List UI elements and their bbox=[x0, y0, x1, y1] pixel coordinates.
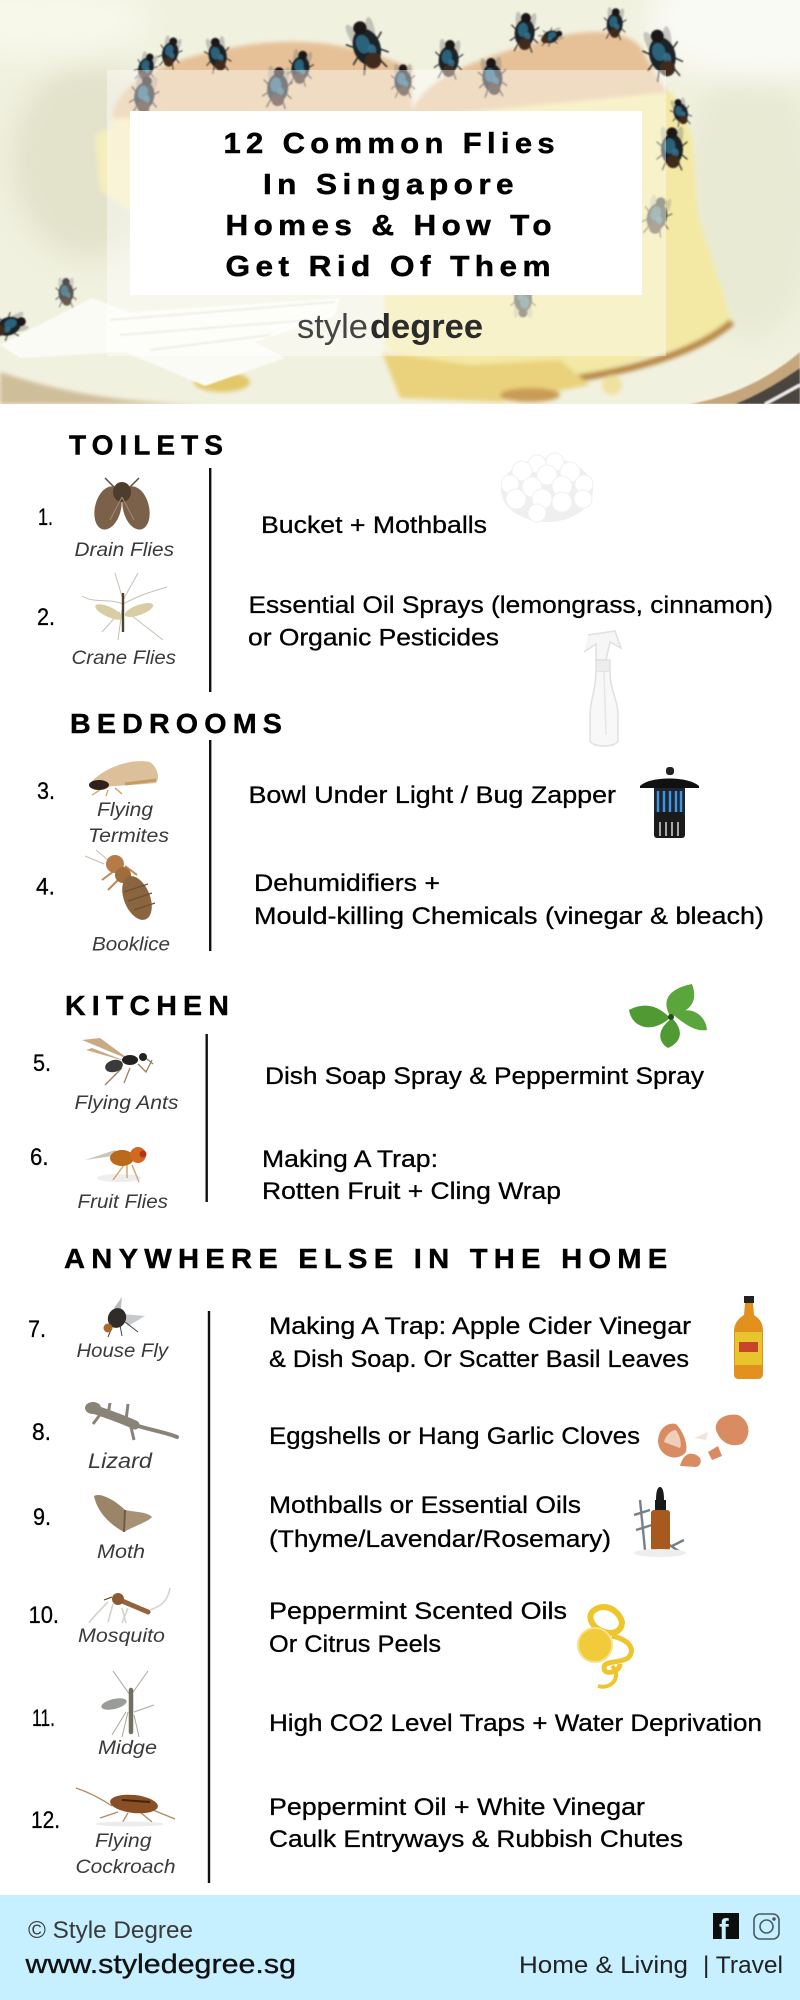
item 7: house fly: House Fly bbox=[76, 1341, 170, 1362]
icon: instagram bbox=[754, 1914, 779, 1939]
item 1: drain flies bbox=[38, 453, 593, 561]
item 2: crane flies: Essential Oil Sprays (lemongrass, cinnamon) bbox=[248, 592, 773, 619]
icon: spray bottle bbox=[584, 631, 621, 746]
divider: bedrooms bbox=[209, 740, 211, 951]
item 11: midge bbox=[32, 1671, 762, 1759]
footer: categories: | Travel bbox=[703, 1952, 783, 1979]
item 5: flying ants: Dish Soap Spray & Peppermint Spray bbox=[265, 1063, 704, 1090]
icon: citrus peel bbox=[578, 1607, 631, 1687]
item 7: house fly: Making A Trap: Apple Cider Vinegar bbox=[269, 1313, 691, 1340]
icon: mint leaf bbox=[629, 984, 707, 1048]
item 10: mosquito: Or Citrus Peels bbox=[269, 1631, 441, 1658]
icon: drain fly bbox=[90, 478, 154, 532]
title card bbox=[130, 111, 642, 295]
divider: anywhere else bbox=[208, 1311, 210, 1883]
item 3: flying termites: 3. bbox=[37, 778, 55, 805]
footer band bbox=[0, 1895, 800, 2000]
item 12: flying cockroach: Flying bbox=[95, 1831, 152, 1852]
item 10: mosquito: 10. bbox=[28, 1602, 59, 1629]
item 4: booklice: Dehumidifiers + bbox=[254, 870, 440, 897]
item 8: lizard: Eggshells or Hang Garlic Cloves bbox=[269, 1423, 640, 1450]
icon: facebook: f bbox=[719, 1914, 729, 1946]
icon: mothballs bbox=[501, 453, 593, 522]
icon: apple cider vinegar bottle bbox=[734, 1296, 763, 1379]
item 4: booklice: Booklice bbox=[92, 934, 170, 956]
icon: lizard bbox=[85, 1402, 177, 1440]
item 3: flying termites: Bowl Under Light / Bug Zapper bbox=[248, 782, 616, 809]
title card: Get Rid Of Them bbox=[226, 251, 556, 283]
header photo: flies on cake bbox=[0, 0, 800, 404]
item 4: booklice: 4. bbox=[36, 874, 55, 900]
divider: toilets bbox=[209, 468, 211, 692]
logo: styledegree bbox=[297, 308, 483, 346]
item 10: mosquito: Peppermint Scented Oils bbox=[269, 1598, 567, 1625]
item 1: drain flies: Bucket + Mothballs bbox=[261, 512, 487, 539]
item 12: flying cockroach: 12. bbox=[31, 1807, 60, 1834]
icon: facebook bbox=[713, 1913, 739, 1946]
footer: categories: Home & Living bbox=[519, 1952, 688, 1979]
item 9: moth bbox=[33, 1487, 686, 1563]
item 3: flying termites: Flying bbox=[97, 800, 153, 821]
heading: bedrooms: BEDROOMS bbox=[70, 708, 288, 739]
item 1: drain flies: 1. bbox=[38, 504, 53, 531]
item 7: house fly: & Dish Soap. Or Scatter Basil Leaves bbox=[269, 1346, 689, 1373]
icon: essential oil bottle bbox=[634, 1487, 686, 1557]
item 10: mosquito bbox=[28, 1588, 631, 1687]
item 12: flying cockroach: Caulk Entryways & Rubbish Chutes bbox=[269, 1826, 683, 1853]
item 8: lizard bbox=[32, 1402, 748, 1473]
item 4: booklice bbox=[36, 850, 764, 956]
logo: styledegree: style bbox=[297, 308, 368, 346]
item 9: moth: 9. bbox=[33, 1504, 51, 1531]
footer: website: www.styledegree.sg bbox=[24, 1949, 296, 1979]
footer: categories bbox=[519, 1952, 783, 1979]
item 7: house fly: 7. bbox=[28, 1316, 46, 1343]
item 12: flying cockroach: Peppermint Oil + White Vinegar bbox=[269, 1794, 645, 1821]
item 5: flying ants bbox=[33, 1038, 704, 1114]
item 2: crane flies: Crane Flies bbox=[72, 648, 177, 669]
title card: 12 Common Flies bbox=[224, 128, 560, 160]
item 9: moth: (Thyme/Lavendar/Rosemary) bbox=[269, 1526, 611, 1553]
icon: flying termite bbox=[89, 761, 158, 796]
heading: anywhere else: ANYWHERE ELSE IN THE HOME bbox=[64, 1243, 674, 1274]
item 7: house fly bbox=[28, 1296, 763, 1379]
title card: In Singapore bbox=[263, 169, 519, 201]
logo: styledegree: degree bbox=[370, 308, 483, 346]
item 4: booklice: Mould-killing Chemicals (vinegar & bleach) bbox=[254, 903, 764, 930]
item 3: flying termites: Termites bbox=[88, 826, 170, 847]
translucent overlay bbox=[107, 70, 666, 356]
item 8: lizard: 8. bbox=[32, 1419, 51, 1446]
item 1: drain flies: Drain Flies bbox=[74, 540, 175, 561]
icon: flying cockroach bbox=[76, 1788, 175, 1826]
icon: booklouse bbox=[85, 850, 158, 924]
section: toilets bbox=[37, 430, 773, 746]
item 3: flying termites bbox=[37, 761, 699, 847]
footer: copyright: © Style Degree bbox=[28, 1917, 193, 1944]
item 6: fruit flies: Rotten Fruit + Cling Wrap bbox=[262, 1178, 561, 1205]
item 11: midge: High CO2 Level Traps + Water Deprivation bbox=[269, 1710, 762, 1737]
title card: Homes & How To bbox=[226, 210, 557, 242]
icon: fruit fly bbox=[85, 1147, 146, 1182]
icon: midge bbox=[100, 1671, 154, 1737]
icon: house fly bbox=[104, 1297, 145, 1337]
item 10: mosquito: Mosquito bbox=[78, 1626, 165, 1647]
item 9: moth: Moth bbox=[97, 1542, 145, 1563]
divider: kitchen bbox=[206, 1034, 208, 1202]
item 2: crane flies: or Organic Pesticides bbox=[248, 624, 499, 652]
item 11: midge: 11. bbox=[32, 1705, 55, 1732]
item 12: flying cockroach bbox=[31, 1788, 683, 1878]
icon: moth bbox=[94, 1495, 152, 1532]
item 2: crane flies: 2. bbox=[37, 604, 55, 631]
item 5: flying ants: Flying Ants bbox=[74, 1093, 179, 1114]
item 2: crane flies bbox=[37, 573, 773, 746]
item 6: fruit flies: 6. bbox=[30, 1144, 48, 1171]
icon: flying ant bbox=[82, 1038, 153, 1085]
item 6: fruit flies: Making A Trap: bbox=[262, 1146, 438, 1173]
icon: mosquito bbox=[89, 1588, 170, 1623]
heading: kitchen: KITCHEN bbox=[65, 990, 235, 1021]
item 12: flying cockroach: Cockroach bbox=[76, 1857, 176, 1878]
heading: toilets: TOILETS bbox=[69, 430, 229, 460]
icon: eggshells bbox=[658, 1415, 748, 1467]
section: anywhere else in the home bbox=[28, 1243, 763, 1883]
item 11: midge: Midge bbox=[98, 1738, 157, 1759]
section: kitchen bbox=[30, 984, 707, 1213]
item 5: flying ants: 5. bbox=[33, 1050, 51, 1077]
item 9: moth: Mothballs or Essential Oils bbox=[269, 1492, 581, 1519]
item 8: lizard: Lizard bbox=[88, 1450, 153, 1473]
item 6: fruit flies bbox=[30, 1144, 561, 1213]
item 6: fruit flies: Fruit Flies bbox=[78, 1192, 169, 1213]
section: bedrooms bbox=[36, 708, 764, 956]
icon: bug zapper bbox=[640, 767, 699, 838]
icon: crane fly bbox=[82, 573, 167, 640]
